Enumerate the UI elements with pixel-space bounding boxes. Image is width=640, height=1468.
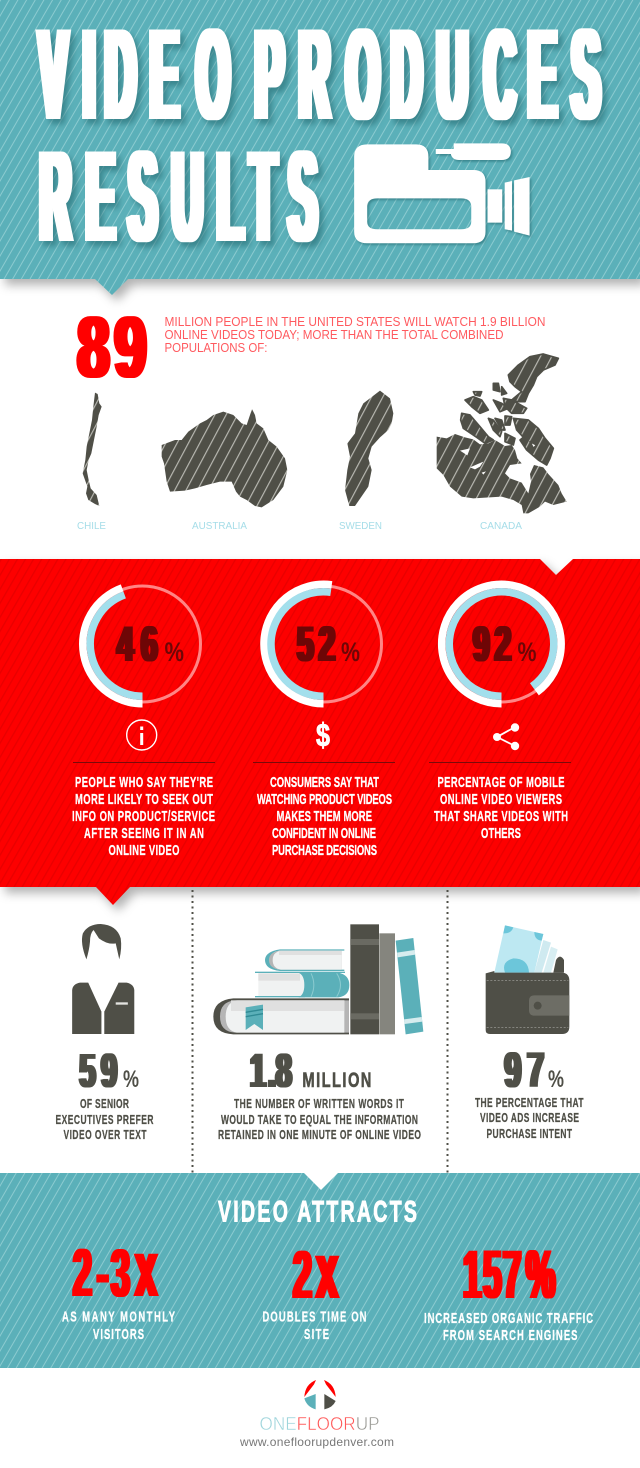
- text: seek out info: ONLINE VIDEO: [108, 842, 179, 859]
- text: mobile viewers: ONLINE VIDEO VIEWERS: [440, 791, 562, 808]
- ring stat 52%: 52: [297, 616, 335, 672]
- title: [39, 1, 600, 269]
- ring stat 92%: [442, 584, 561, 704]
- icon: books: [213, 924, 423, 1034]
- stat: 157%: INCREASED ORGANIC TRAFFIC: [424, 1310, 593, 1327]
- logo mark: [304, 1380, 336, 1409]
- stat: 1.8 million: [218, 1045, 421, 1143]
- text: consumers: PURCHASE DECISIONS: [272, 842, 377, 859]
- stat: 2x: SITE: [304, 1326, 329, 1343]
- logo wordmark: ONEFLOORUP: [260, 1413, 380, 1434]
- text: mobile viewers: [434, 774, 568, 842]
- text: consumers: [257, 774, 392, 859]
- stat: 97%: VIDEO ADS INCREASE: [480, 1111, 579, 1126]
- icon: video camera: [354, 143, 530, 243]
- stat: 1.8 million: WOULD TAKE TO EQUAL THE INFORMATION: [221, 1113, 418, 1128]
- stat: 59%: EXECUTIVES PREFER: [56, 1113, 154, 1128]
- text: mobile viewers: OTHERS: [481, 825, 521, 842]
- stat: 59%: %: [123, 1066, 139, 1093]
- stat: 1.8 million: THE NUMBER OF WRITTEN WORDS IT: [234, 1097, 404, 1112]
- text: mobile viewers: PERCENTAGE OF MOBILE: [438, 774, 565, 791]
- title: VIDEO PRODUCES: [39, 1, 600, 147]
- big number 89: 89: [78, 298, 146, 396]
- stat: 97%: THE PERCENTAGE THAT: [475, 1096, 584, 1111]
- intro text: ONLINE VIDEOS TODAY; MORE THAN THE TOTAL COMBINED: [164, 327, 504, 342]
- text: seek out info: PEOPLE WHO SAY THEY'RE: [75, 774, 213, 791]
- text: mobile viewers: THAT SHARE VIDEOS WITH: [434, 808, 568, 825]
- stat: 2-3x: AS MANY MONTHLY: [62, 1308, 175, 1325]
- teal band with notch: [0, 1173, 640, 1368]
- ring stat 52%: %: [341, 637, 360, 667]
- country labels: CANADA: [480, 520, 522, 532]
- stat: 97%: PURCHASE INTENT: [487, 1127, 572, 1142]
- icon: info: [127, 720, 157, 750]
- ring stat 92%: %: [518, 637, 536, 667]
- text: consumers: MAKES THEM MORE: [277, 808, 372, 825]
- ring stat 92%: 92: [473, 616, 511, 672]
- stat: 1.8 million: MILLION: [302, 1068, 371, 1092]
- ring stat 52%: [264, 584, 382, 704]
- map: canada: [437, 354, 567, 513]
- heading: video attracts: VIDEO ATTRACTS: [218, 1195, 417, 1229]
- stat: 2-3x: x: [135, 1225, 157, 1314]
- text: consumers: WATCHING PRODUCT VIDEOS: [257, 791, 392, 808]
- icon: executive: [72, 924, 134, 1034]
- stat: 157%: [424, 1237, 593, 1344]
- country labels: [77, 520, 522, 532]
- country maps: [83, 354, 567, 513]
- ring stat 46%: [83, 586, 200, 704]
- stat: 97%: 97: [504, 1042, 544, 1098]
- stat: 2-3x: [62, 1225, 175, 1343]
- icon: share: [493, 723, 519, 750]
- ring stat 46%: 46: [117, 616, 158, 672]
- stat: 59%: [56, 1045, 154, 1143]
- stat: 59%: VIDEO OVER TEXT: [64, 1128, 147, 1143]
- text: seek out info: MORE LIKELY TO SEEK OUT: [75, 791, 213, 808]
- stat: 157%: 157%: [463, 1237, 555, 1313]
- stat: 97%: [475, 1042, 584, 1142]
- logo: [239, 1380, 394, 1449]
- intro text: POPULATIONS OF:: [164, 340, 268, 355]
- panel: 89 million: [77, 298, 567, 532]
- text: seek out info: [72, 774, 215, 859]
- title: RESULTS: [40, 123, 317, 269]
- teal header band with pointer: [0, 0, 640, 295]
- stat: 2x: 2: [293, 1237, 312, 1313]
- map: chile: [83, 393, 102, 506]
- country labels: AUSTRALIA: [192, 520, 247, 532]
- stat: 2-3x: 2-3: [73, 1235, 130, 1311]
- stat: 97%: %: [548, 1066, 564, 1093]
- stat: 2-3x: VISITORS: [93, 1326, 144, 1343]
- icon: dollar: $: [316, 717, 330, 753]
- stat: 2x: x: [316, 1227, 338, 1316]
- icon: wallet: [486, 925, 569, 1034]
- website url: www.onefloorupdenver.com: [239, 1435, 394, 1449]
- map: sweden: [345, 391, 393, 506]
- panel: red statistics: [0, 559, 640, 905]
- stat: 59%: 59: [80, 1045, 117, 1098]
- stat: 2x: [262, 1227, 366, 1343]
- intro text: [164, 314, 546, 355]
- country labels: CHILE: [77, 520, 106, 532]
- stat: 157%: FROM SEARCH ENGINES: [443, 1327, 577, 1344]
- country labels: SWEDEN: [339, 520, 382, 532]
- text: consumers: CONSUMERS SAY THAT: [270, 774, 379, 791]
- text: consumers: CONFIDENT IN ONLINE: [272, 825, 376, 842]
- panel: header: [0, 0, 640, 295]
- intro text: MILLION PEOPLE IN THE UNITED STATES WILL WATCH 1.9 BILLION: [164, 314, 546, 329]
- map: australia: [162, 409, 287, 507]
- stat: 1.8 million: 1.8: [250, 1045, 292, 1098]
- text: seek out info: INFO ON PRODUCT/SERVICE: [72, 808, 215, 825]
- stat: 2x: DOUBLES TIME ON: [262, 1308, 366, 1325]
- stat: 1.8 million: RETAINED IN ONE MINUTE OF ONLINE VIDEO: [218, 1128, 421, 1143]
- text: seek out info: AFTER SEEING IT IN AN: [84, 825, 204, 842]
- ring stat 46%: %: [164, 637, 184, 667]
- red band with notch and pointer: [0, 559, 640, 905]
- panel: executives, words and purchase stats: [56, 890, 584, 1173]
- panel: video attracts: [0, 1173, 640, 1368]
- stat: 59%: OF SENIOR: [80, 1097, 129, 1112]
